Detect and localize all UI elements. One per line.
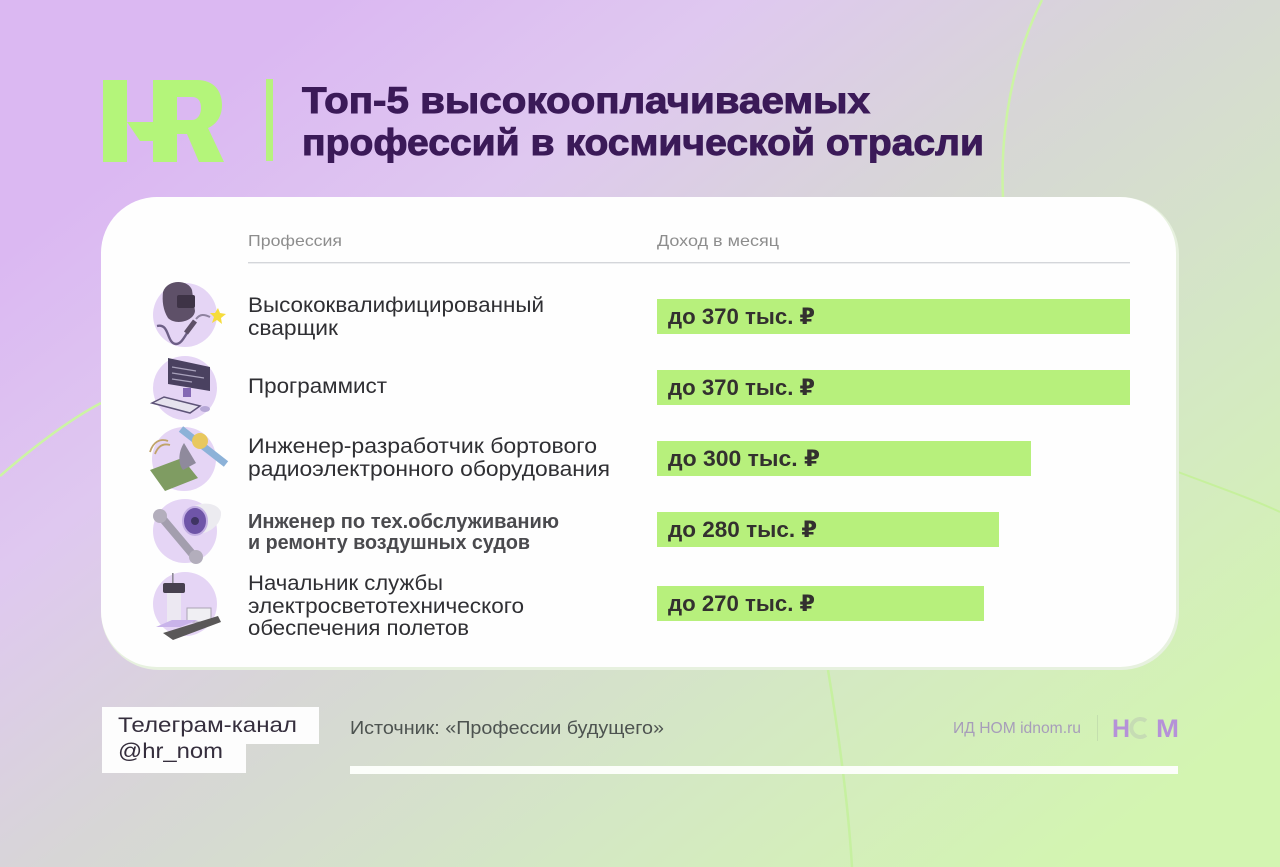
income bar <box>657 586 984 621</box>
profession text <box>248 510 559 554</box>
profession text: сварщик <box>248 317 339 340</box>
telegram label <box>102 707 319 773</box>
logo: НОМ <box>1112 715 1179 743</box>
row 5: lighting chief <box>153 572 984 640</box>
income bar <box>657 441 1031 476</box>
income bar <box>657 370 1130 405</box>
profession text: обеспечения полетов <box>248 617 469 640</box>
income bar: до 370 тыс. ₽ <box>668 304 815 329</box>
icon: control tower and runway <box>153 572 221 640</box>
income bar <box>657 299 1130 334</box>
icon: circuit board and satellite <box>150 427 226 491</box>
row 2: programmer <box>152 356 1130 420</box>
profession text: радиоэлектронного оборудования <box>248 458 610 481</box>
profession text: электросветотехнического <box>248 595 524 618</box>
profession text: Программист <box>248 375 387 398</box>
profession text <box>248 435 610 481</box>
income bar: до 280 тыс. ₽ <box>668 517 817 542</box>
income bar: до 270 тыс. ₽ <box>668 591 815 616</box>
income bar: до 370 тыс. ₽ <box>668 375 815 400</box>
icon: wrench and turbine <box>153 499 221 564</box>
income bar <box>657 512 999 547</box>
income bar: до 300 тыс. ₽ <box>668 446 820 471</box>
source text: Источник: «Профессии будущего» <box>350 717 664 738</box>
logo: HR <box>103 80 224 162</box>
profession text <box>248 294 544 340</box>
row 4: aircraft engineer <box>153 499 999 564</box>
icon: welding mask <box>153 282 226 347</box>
profession text: и ремонту воздушных судов <box>248 531 530 554</box>
logo: НОМ: H <box>1112 715 1130 743</box>
row 1: welder <box>153 282 1130 347</box>
icon: computer <box>152 356 217 420</box>
row 3: radio engineer <box>150 427 1031 491</box>
logo divider <box>266 79 273 161</box>
profession text: Инженер-разработчик бортового <box>248 435 597 458</box>
logo: НОМ: M <box>1156 715 1179 743</box>
footer line <box>350 766 1178 774</box>
telegram label: Телеграм-канал <box>118 714 297 737</box>
profession text: Высококвалифицированный <box>248 294 544 317</box>
telegram label: @hr_nom <box>118 740 223 763</box>
title: профессий в космической отрасли <box>302 121 984 163</box>
profession text <box>248 572 524 640</box>
panel: table card <box>101 197 1179 670</box>
publisher text: ИД НОМ idnom.ru <box>953 720 1081 737</box>
profession text: Начальник службы <box>248 572 443 595</box>
profession text: Инженер по тех.обслуживанию <box>248 510 559 533</box>
column header: profession: Профессия <box>248 233 342 250</box>
title: Топ-5 высокооплачиваемых <box>302 79 870 121</box>
title <box>302 79 984 163</box>
column header: income: Доход в месяц <box>657 233 779 250</box>
